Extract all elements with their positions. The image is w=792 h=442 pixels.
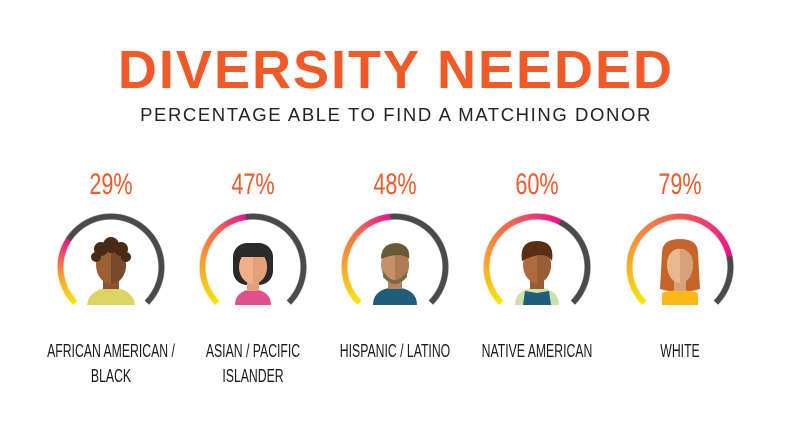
panel: white xyxy=(626,168,734,361)
icon: person xyxy=(515,241,559,305)
gauge xyxy=(626,213,734,305)
panel: hispanic xyxy=(340,168,450,361)
percentage: 79% xyxy=(658,168,702,201)
gauge xyxy=(341,213,449,305)
panel: native american xyxy=(482,168,592,361)
title: DIVERSITY NEEDED xyxy=(118,40,674,100)
percentage: 29% xyxy=(89,168,133,201)
gauge xyxy=(199,213,307,305)
percentage: 60% xyxy=(515,168,559,201)
panel: african american xyxy=(47,168,175,386)
icon: person xyxy=(660,239,700,305)
label: AFRICAN AMERICAN / xyxy=(47,341,175,361)
label: NATIVE AMERICAN xyxy=(482,341,592,361)
subtitle: PERCENTAGE ABLE TO FIND A MATCHING DONOR xyxy=(140,104,652,125)
label: ASIAN / PACIFIC xyxy=(206,341,300,361)
icon: person xyxy=(87,237,135,305)
icon: person xyxy=(233,243,273,305)
icon: person xyxy=(373,243,417,305)
gauge xyxy=(483,213,591,305)
percentage: 47% xyxy=(231,168,275,201)
label: HISPANIC / LATINO xyxy=(340,341,450,361)
panel: asian xyxy=(199,168,307,386)
label: BLACK xyxy=(91,366,131,386)
percentage: 48% xyxy=(373,168,417,201)
label xyxy=(206,341,300,386)
label xyxy=(47,341,175,386)
label: ISLANDER xyxy=(222,366,284,386)
label: WHITE xyxy=(660,341,700,361)
gauge xyxy=(57,213,165,305)
